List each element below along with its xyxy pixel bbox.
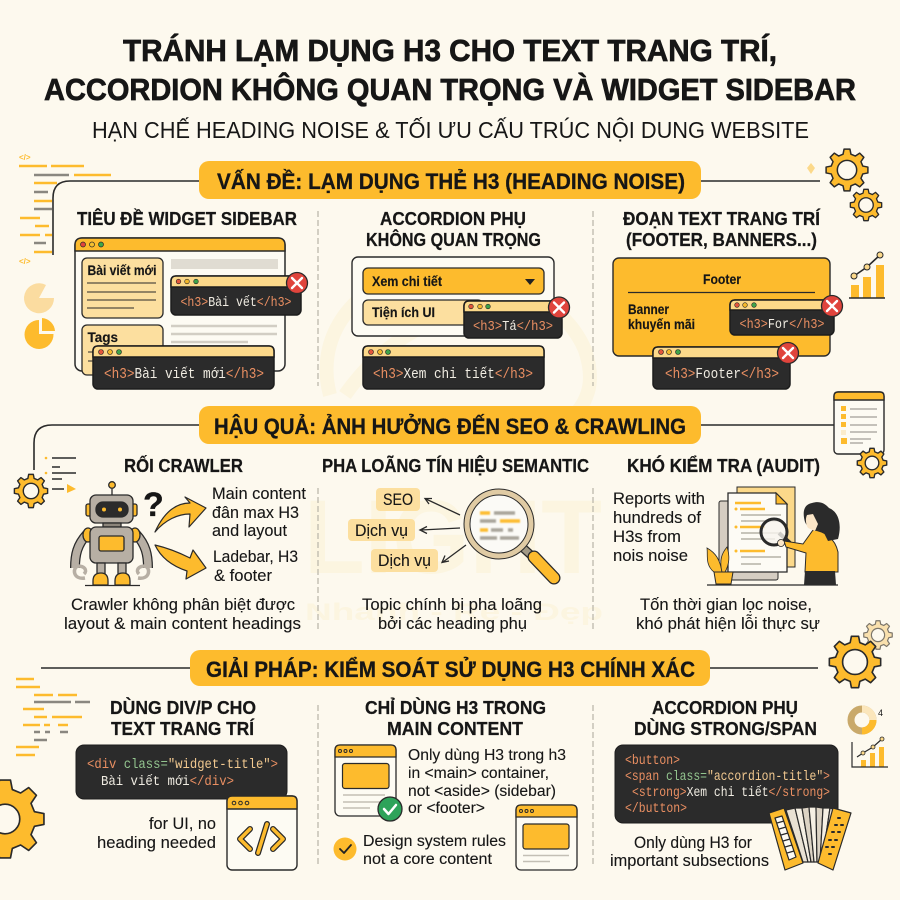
icon: accordion instrument (769, 807, 851, 870)
heading: ĐOẠN TEXT TRANG TRÍ (623, 208, 821, 229)
text: sidebar: & footer (214, 567, 272, 585)
text: design system: not a core content (363, 851, 493, 868)
caption: Topic chính bị pha loãng (362, 596, 542, 614)
text: only h3: Only dùng H3 trong h3 (408, 747, 566, 764)
icon: checklist (834, 392, 884, 454)
tag: dịch vụ (348, 519, 415, 541)
code popup: Xem chi tiết: <h3>Xem chi tiết</h3> (373, 366, 533, 383)
heading (365, 697, 546, 739)
accordion mock: Xem chi tiết (372, 274, 442, 289)
code popup: Footer: <h3>Footer</h3> (665, 366, 779, 383)
decoration: code lines top left: </> (19, 257, 31, 266)
accordion mock (352, 257, 554, 336)
browser window mock (75, 238, 285, 375)
heading (634, 698, 817, 739)
panel: dùng div/p (76, 697, 297, 870)
code popup: Bài viết mới: <h3>Bài viết mới</h3> (104, 366, 264, 383)
panel: đoạn text trang trí (613, 208, 842, 389)
text: main content: đân max H3 (212, 504, 299, 522)
code block: </button> (625, 801, 687, 817)
text: reports: hundreds of (613, 509, 701, 527)
heading: ACCORDION PHỤ (652, 698, 798, 718)
heading (623, 208, 821, 250)
watermark logo: Nhanh - Rẻ - Đẹp (305, 599, 603, 626)
text: only h3: or <footer> (408, 800, 485, 817)
code popup: Footer (653, 347, 790, 389)
text: only h3 (408, 747, 566, 817)
caption: khó phát hiện lỗi thực sự (636, 614, 820, 633)
watermark logo (304, 270, 603, 626)
footer mock (613, 258, 830, 356)
code popup: Bài vết: <h3>Bài vết</h3> (180, 294, 292, 311)
panel: khó kiểm tra (613, 455, 840, 633)
icon: settings list (45, 457, 76, 493)
panel: tiêu đề widget sidebar (75, 208, 308, 389)
caption (362, 596, 542, 633)
panel: rối crawler (64, 455, 306, 633)
text: sidebar (213, 548, 298, 585)
code block: <strong>Xem chi tiết</strong> (632, 784, 830, 801)
section banner: giải pháp: GIẢI PHÁP: KIỂM SOÁT SỬ DỤNG H3 CHÍNH XÁC (206, 657, 695, 682)
code popup: Bài vết (171, 276, 301, 315)
heading: CHỈ DÙNG H3 TRONG (365, 697, 546, 718)
code block: Bài viết mới</div> (101, 773, 234, 790)
heading: KHÔNG QUAN TRỌNG (366, 229, 541, 250)
text: reports: H3s from (613, 528, 681, 546)
tag: dịch vụ: Dịch vụ (378, 552, 431, 570)
section banner: vấn đề (53, 161, 820, 255)
heading (110, 697, 256, 739)
caption: Crawler không phân biệt được (71, 596, 295, 614)
error badge (286, 272, 308, 294)
code block: <span class="accordion-title"> (625, 769, 830, 785)
tag: dịch vụ (371, 549, 438, 572)
icon: robot (74, 482, 149, 586)
icon: trend chart (852, 737, 888, 767)
text: design system: Design system rules (363, 833, 506, 850)
title (44, 33, 856, 107)
icon: gear large (826, 149, 868, 191)
text: reports: Reports with (613, 490, 705, 508)
decoration: code lines top left: </> (19, 153, 31, 162)
browser window mock: Tags (88, 330, 118, 345)
code popup: Tá: <h3>Tá</h3> (473, 319, 553, 335)
heading (366, 209, 541, 250)
text: only h3: in <main> container, (408, 765, 549, 782)
caption (64, 596, 301, 633)
text: main content: Main content (212, 485, 306, 503)
text: main content (212, 485, 306, 540)
error badge (822, 296, 842, 316)
panel: pha loãng tín hiệu semantic (322, 455, 589, 633)
decoration: code lines lower left (16, 679, 90, 755)
code block (615, 745, 838, 823)
heading: TEXT TRANG TRÍ (111, 718, 255, 739)
footer mock: Footer (703, 272, 742, 287)
tag: dịch vụ: Dịch vụ (355, 522, 408, 540)
text: for UI: heading needed (97, 834, 216, 852)
caption (636, 596, 820, 633)
panel: accordion phụ (352, 209, 570, 389)
icon: settings gear left (14, 474, 48, 508)
code popup: Tá (464, 301, 562, 338)
footer mock: khuyến mãi (628, 317, 695, 332)
text: only h3: not <aside> (sidebar) (408, 783, 556, 800)
heading: TIÊU ĐỀ WIDGET SIDEBAR (77, 208, 297, 229)
caption: bởi các heading phụ (378, 615, 527, 633)
icon: sparkle (807, 163, 815, 174)
section banner: vấn đề: VẤN ĐỀ: LẠM DỤNG THẺ H3 (HEADING NOISE) (217, 169, 685, 194)
error badge (778, 342, 798, 364)
section banner: hậu quả: HẬU QUẢ: ẢNH HƯỞNG ĐẾN SEO & CRAWLING (214, 414, 686, 439)
text: sidebar: Ladebar, H3 (213, 548, 298, 566)
question mark: ? (143, 486, 164, 524)
caption: Tốn thời gian lọc noise, (640, 596, 812, 614)
icon: donut chart: 4 (878, 708, 883, 718)
icon: donut chart (851, 708, 883, 731)
heading: DÙNG STRONG/SPAN (634, 718, 817, 739)
code popup: For (730, 300, 834, 335)
text: only h3: Only dùng H3 for (634, 834, 752, 852)
code block: <div class="widget-title"> (87, 757, 278, 773)
accordion mock: Tiện ích UI (372, 305, 435, 320)
text: for UI: for UI, no (149, 815, 216, 833)
title: ACCORDION KHÔNG QUAN TRỌNG VÀ WIDGET SIDEBAR (44, 71, 856, 107)
panel: accordion phụ dùng strong (610, 698, 851, 870)
heading: KHÓ KIỂM TRA (AUDIT) (627, 455, 820, 476)
text: main content: and layout (212, 522, 287, 540)
icon: big gear bottom left (0, 780, 44, 858)
icon: main window (335, 745, 396, 816)
text: for UI (97, 815, 216, 852)
section banner: hậu quả (34, 406, 835, 470)
panel: chỉ dùng h3 (334, 697, 577, 870)
icon: pale gear (864, 621, 892, 649)
code popup: For: <h3>For</h3> (740, 317, 824, 333)
icon: large gear right (829, 636, 881, 688)
error badge (548, 297, 570, 318)
icon: yellow check (334, 838, 356, 860)
arrows from magnifier (420, 498, 466, 562)
text: reports (613, 490, 705, 565)
icon: growth chart (849, 252, 885, 298)
heading: RỐI CRAWLER (124, 455, 243, 476)
icon: gear small (850, 189, 882, 221)
footer mock: Banner (628, 302, 670, 317)
text: design system (363, 833, 506, 868)
icon: code window (227, 796, 297, 870)
code popup: Bài viết mới (93, 346, 274, 389)
arrow down (155, 545, 206, 579)
text: reports: nois noise (613, 547, 688, 565)
watermark logo: LIGHT (304, 479, 602, 596)
heading: ACCORDION PHỤ (380, 209, 526, 229)
illustration: documents and person (707, 487, 840, 585)
code popup: Xem chi tiết (363, 346, 544, 389)
caption: layout & main content headings (64, 615, 301, 633)
decoration: code lines top left (19, 153, 111, 266)
heading: MAIN CONTENT (387, 719, 523, 739)
heading: DÙNG DIV/P CHO (110, 697, 256, 718)
icon: magnifier (467, 492, 554, 578)
heading: (FOOTER, BANNERS...) (626, 230, 817, 250)
section banner: giải pháp (41, 650, 818, 686)
text: only h3: important subsections (610, 852, 769, 870)
subtitle: HẠN CHẾ HEADING NOISE & TỐI ƯU CẤU TRÚC NỘI DUNG WEBSITE (92, 116, 809, 143)
arrow up (155, 497, 206, 532)
tag: SEO: SEO (383, 491, 413, 509)
icon: content window (516, 805, 577, 870)
tag: SEO (376, 488, 420, 511)
heading: PHA LOÃNG TÍN HIỆU SEMANTIC (322, 455, 589, 476)
icon: pie charts (24, 283, 55, 349)
title: TRÁNH LẠM DỤNG H3 CHO TEXT TRANG TRÍ, (123, 33, 777, 68)
code block (76, 745, 287, 799)
browser window mock: Bài viết mới (88, 263, 156, 278)
code block: <button> (625, 753, 680, 769)
icon: green check (378, 797, 402, 821)
icon: gear (857, 448, 887, 478)
text: only h3 (610, 834, 769, 870)
